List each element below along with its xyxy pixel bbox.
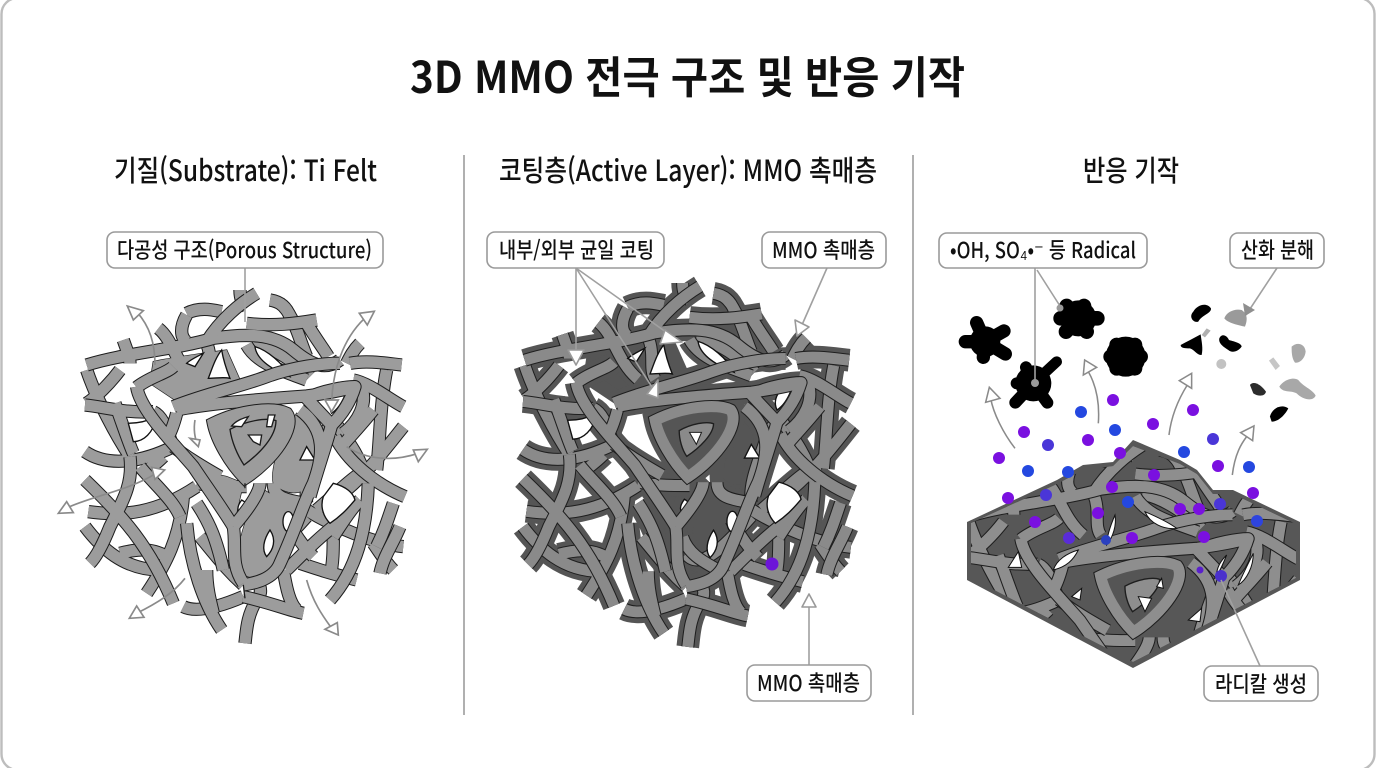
callout lines	[1031, 268, 1277, 666]
title: 3D MMO 전극 구조 및 반응 기작	[410, 42, 965, 106]
coated cube illustration	[523, 283, 853, 647]
pollutant molecules	[965, 300, 1288, 422]
label: radicals: •OH, SO₄•⁻ 등 Radical	[950, 233, 1136, 265]
callout arrows	[568, 268, 827, 665]
flow arrows through pores	[58, 306, 427, 635]
electrode slab illustration	[967, 440, 1300, 668]
label: oxidative decomposition: 산화 분해	[1241, 233, 1314, 265]
heading: active layer: 코팅층(Active Layer): MMO 촉매층	[499, 148, 877, 190]
felt cube illustration	[85, 290, 405, 643]
degraded fragments	[1202, 310, 1316, 399]
radical dots	[993, 394, 1263, 582]
rising arrows	[986, 360, 1254, 475]
panel: reaction mechanism	[938, 156, 1325, 702]
purple catalyst particle	[766, 558, 778, 570]
heading: substrate: 기질(Substrate): Ti Felt	[114, 148, 377, 190]
divider left	[463, 155, 465, 715]
label: porous structure: 다공성 구조(Porous Structure)	[117, 233, 372, 265]
divider right	[912, 155, 914, 715]
label: radical generation: 라디칼 생성	[1215, 667, 1307, 699]
label: MMO catalyst top: MMO 촉매층	[772, 233, 875, 265]
label: porous structure	[107, 232, 383, 322]
label: uniform coating: 내부/외부 균일 코팅	[499, 233, 654, 265]
heading: mechanism: 반응 기작	[1083, 148, 1179, 190]
label: MMO catalyst bottom: MMO 촉매층	[757, 666, 860, 698]
panel: substrate Ti felt	[58, 148, 427, 643]
panel: active layer coating	[487, 148, 886, 701]
